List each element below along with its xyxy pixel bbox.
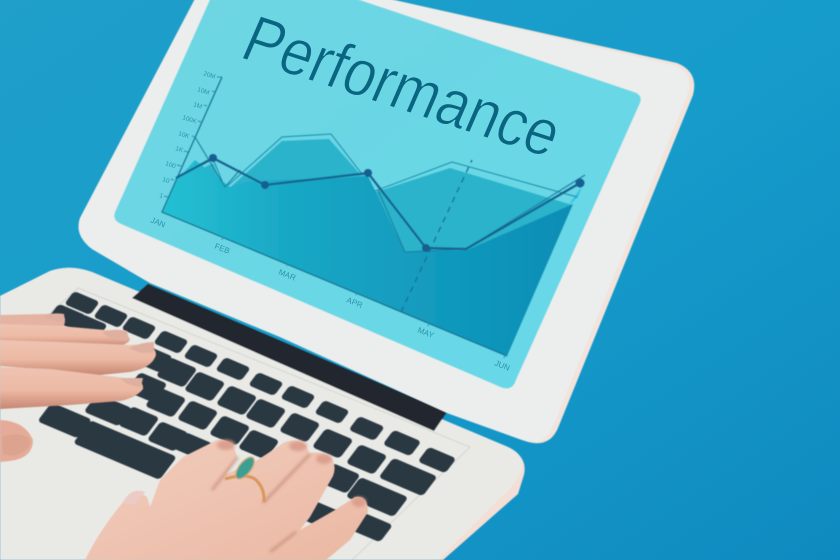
light area series [162, 139, 572, 356]
dashed marker line [401, 160, 472, 312]
x axis labels: APR [345, 296, 364, 310]
finger two [0, 324, 130, 347]
fingernails [44, 313, 154, 387]
keyboard hinge [132, 284, 447, 431]
right hand [85, 440, 368, 560]
finger shading [212, 454, 310, 552]
y axis labels: 1M [192, 101, 203, 111]
finger four [0, 367, 143, 409]
x axis labels: MAR [277, 268, 297, 283]
y axis labels: 10 [161, 176, 171, 185]
thumb [0, 420, 33, 462]
keyboard keys [37, 291, 456, 542]
y axis labels: 10K [177, 130, 191, 141]
y axis labels: 1K [174, 145, 185, 155]
light outline [176, 134, 577, 197]
y axis labels: 100K [181, 114, 198, 126]
data points [209, 154, 584, 252]
thumb nail [2, 434, 30, 456]
y axis labels [158, 70, 216, 200]
title: Performance: Performance [232, 3, 572, 172]
keyboard outline [40, 288, 470, 560]
finger three [0, 340, 156, 375]
finger one [0, 314, 65, 327]
top right triangle [568, 186, 582, 206]
laptop lid [78, 0, 694, 443]
y axis labels: 1 [158, 192, 164, 200]
x axis labels: JAN [149, 216, 167, 230]
x axis labels: MAY [416, 326, 436, 340]
axes [162, 77, 507, 356]
y axis labels: 10M [196, 86, 210, 97]
x axis labels: JUN [493, 359, 511, 373]
screen [114, 0, 641, 388]
ring band [225, 476, 264, 502]
laptop base [0, 268, 525, 560]
ring stone [232, 454, 258, 482]
axis ticks [164, 77, 505, 358]
thumb nail [123, 491, 145, 505]
left hand [0, 313, 156, 462]
x axis labels [149, 216, 511, 373]
hand silhouette [85, 440, 368, 560]
fingertip tint [217, 440, 366, 507]
x axis labels: FEB [213, 242, 231, 256]
area chart [162, 77, 585, 358]
thin outline series [195, 137, 585, 252]
y axis labels: 100 [164, 160, 177, 170]
dark area series [162, 160, 573, 356]
main line series [176, 158, 580, 249]
y axis labels: 20M [202, 70, 216, 81]
